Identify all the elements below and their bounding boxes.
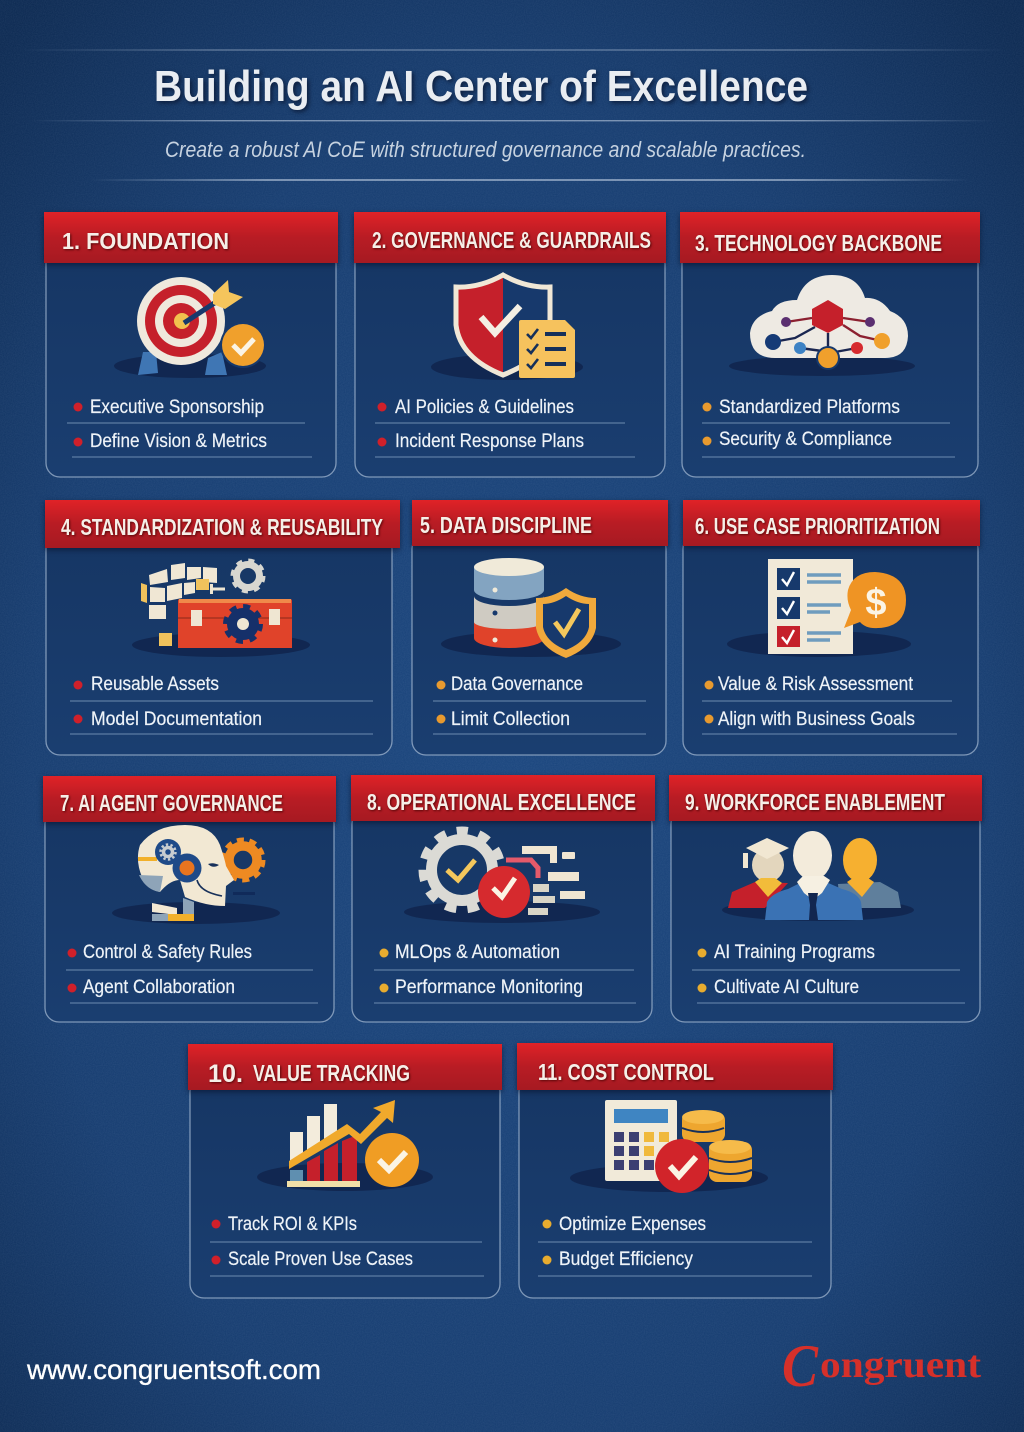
bullets 7: Agent Collaboration <box>83 977 235 998</box>
panel 2: governance and guardrails <box>354 212 666 477</box>
icon: growth chart with check <box>257 1100 433 1191</box>
bullets 9 <box>692 942 965 1003</box>
panel 3: technology backbone <box>680 212 980 477</box>
panel 6: use case prioritization <box>683 500 980 755</box>
heading 7: 7. AI AGENT GOVERNANCE <box>60 790 283 816</box>
bullets 5: Data Governance <box>451 674 583 695</box>
icon: database and shield <box>441 558 621 658</box>
heading 2: 2. GOVERNANCE & GUARDRAILS <box>372 227 651 253</box>
bullets 7 <box>66 942 318 1003</box>
title: Building an AI Center of Excellence <box>154 62 808 111</box>
heading 10 <box>208 1060 410 1088</box>
bullets 4 <box>70 674 373 734</box>
heading 3: 3. TECHNOLOGY BACKBONE <box>695 230 942 256</box>
heading 8: 8. OPERATIONAL EXCELLENCE <box>367 789 636 815</box>
icon: calculator and coins <box>570 1100 768 1193</box>
bullets 3: Standardized Platforms <box>719 397 900 418</box>
heading 9: 9. WORKFORCE ENABLEMENT <box>685 789 945 815</box>
bullets 3: Security & Compliance <box>719 429 892 450</box>
bullets 2: Incident Response Plans <box>395 431 584 452</box>
bullets 6: Align with Business Goals <box>718 709 915 730</box>
bullets 10 <box>210 1214 484 1276</box>
panel 9: workforce enablement <box>669 775 982 1022</box>
icon: shield and checklist <box>431 275 583 380</box>
icon: checklist and dollar bubble <box>727 559 911 657</box>
bullets 6: Value & Risk Assessment <box>718 674 914 695</box>
footer logo: C <box>782 1333 819 1399</box>
bullets 10: Scale Proven Use Cases <box>228 1249 413 1270</box>
bullets 3 <box>702 397 955 457</box>
heading 6: 6. USE CASE PRIORITIZATION <box>695 513 940 539</box>
icon: cloud network <box>729 275 915 376</box>
heading 11: 11. COST CONTROL <box>538 1059 714 1085</box>
bullets 11: Budget Efficiency <box>559 1249 693 1270</box>
icon: checklist and dollar bubble: $ <box>865 582 887 624</box>
bullets 4: Model Documentation <box>91 709 262 730</box>
bullets 2 <box>375 397 635 457</box>
bullets 7: Control & Safety Rules <box>83 942 252 963</box>
panel 11: cost control <box>517 1043 833 1298</box>
footer website url: www.congruentsoft.com <box>26 1354 321 1385</box>
footer logo: ongruent <box>820 1344 981 1386</box>
bullets 1: Define Vision & Metrics <box>90 431 267 452</box>
panel 4: standardization and reusability <box>45 500 400 755</box>
bullets 1 <box>67 397 312 457</box>
heading 1: 1. FOUNDATION <box>62 228 229 254</box>
panel 1: foundation <box>44 212 338 477</box>
bullets 11 <box>538 1214 812 1276</box>
bullets 8: Performance Monitoring <box>395 977 583 998</box>
bullets 6 <box>702 674 957 734</box>
icon: people with graduation cap <box>722 831 914 921</box>
bullets 8: MLOps & Automation <box>395 942 560 963</box>
heading 4: 4. STANDARDIZATION & REUSABILITY <box>61 514 383 540</box>
bullets 5 <box>433 674 646 734</box>
heading 10: VALUE TRACKING <box>253 1060 410 1086</box>
subtitle: Create a robust AI CoE with structured governance and scalable practices. <box>165 137 806 162</box>
icon: target with arrow and check <box>114 277 266 378</box>
heading 10: 10. <box>208 1060 243 1088</box>
icon: gear with checks and data blocks <box>404 830 600 923</box>
heading 5: 5. DATA DISCIPLINE <box>420 512 592 538</box>
panel 10: value tracking <box>188 1044 502 1298</box>
footer logo <box>782 1333 981 1399</box>
bullets 5: Limit Collection <box>451 709 570 730</box>
bullets 9: AI Training Programs <box>714 942 875 963</box>
header rule lines <box>20 50 1005 181</box>
panel 7: AI agent governance <box>43 776 336 1022</box>
panel 8: operational excellence <box>351 775 655 1022</box>
bullets 9: Cultivate AI Culture <box>714 977 859 998</box>
bullets 2: AI Policies & Guidelines <box>395 397 574 418</box>
icon: AI head with gears <box>112 825 280 924</box>
panel 5: data discipline <box>412 500 668 755</box>
bullets 11: Optimize Expenses <box>559 1214 706 1235</box>
bullets 1: Executive Sponsorship <box>90 397 264 418</box>
bullets 10: Track ROI & KPIs <box>228 1214 357 1235</box>
icon: toolbox with gears and blocks <box>132 560 310 657</box>
bullets 4: Reusable Assets <box>91 674 219 695</box>
bullets 8 <box>374 942 636 1003</box>
